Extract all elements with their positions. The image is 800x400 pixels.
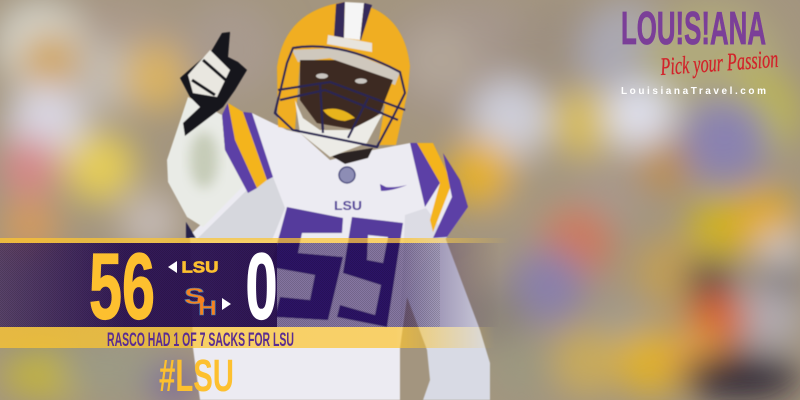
player: glove white panel	[188, 50, 230, 97]
player: helmet stripes	[334, 2, 345, 38]
LSU pointer and logo: LSU	[182, 260, 218, 276]
player: underarm sleeve	[186, 222, 196, 238]
player: eyes	[316, 73, 367, 84]
hashtag: #LSU	[159, 350, 234, 400]
player: jersey torso	[190, 113, 468, 400]
player: shoulder stripes left	[222, 103, 257, 193]
player: chest logos: LSU	[334, 198, 362, 213]
player: face mask	[275, 46, 405, 147]
player photo	[167, 2, 490, 400]
sponsor logo: Louisiana: LouisianaTravel.com	[621, 86, 766, 97]
player: helmet nose bumper	[327, 35, 372, 52]
player: neck	[330, 148, 373, 164]
player: face	[300, 60, 393, 130]
Southeastern logo and pointer: H	[198, 297, 217, 320]
player: helmet shell	[277, 2, 410, 145]
opponent score: 0: 0	[246, 234, 278, 338]
score band: purple panel	[0, 243, 500, 327]
player: shoulder stripes right	[410, 143, 440, 207]
player: chest logos	[334, 167, 407, 213]
player: forearm shading	[190, 132, 218, 188]
player: jersey side panel	[196, 177, 285, 240]
player: glove stripes	[192, 60, 228, 95]
player: mouth guard	[323, 109, 355, 121]
Southeastern logo and pointer	[184, 283, 231, 320]
Southeastern logo and pointer: S	[184, 283, 205, 309]
LSU pointer and logo	[168, 260, 218, 276]
player: jersey number shaded under band	[277, 243, 400, 327]
player: under brim	[292, 48, 400, 85]
player: right arm sleeve	[407, 237, 490, 400]
player: jersey number 59	[270, 207, 403, 327]
player: chin guard	[295, 100, 383, 157]
player: right side jersey shading	[400, 208, 447, 330]
LSU score: 56: 56	[89, 234, 155, 338]
player: glove	[180, 32, 247, 136]
sponsor logo: Louisiana	[621, 2, 779, 97]
caption: RASCO HAD 1 OF 7 SACKS FOR LSU	[107, 330, 294, 351]
top gold stripe	[0, 238, 510, 243]
player: raised left arm	[167, 97, 247, 227]
caption band	[0, 327, 495, 348]
